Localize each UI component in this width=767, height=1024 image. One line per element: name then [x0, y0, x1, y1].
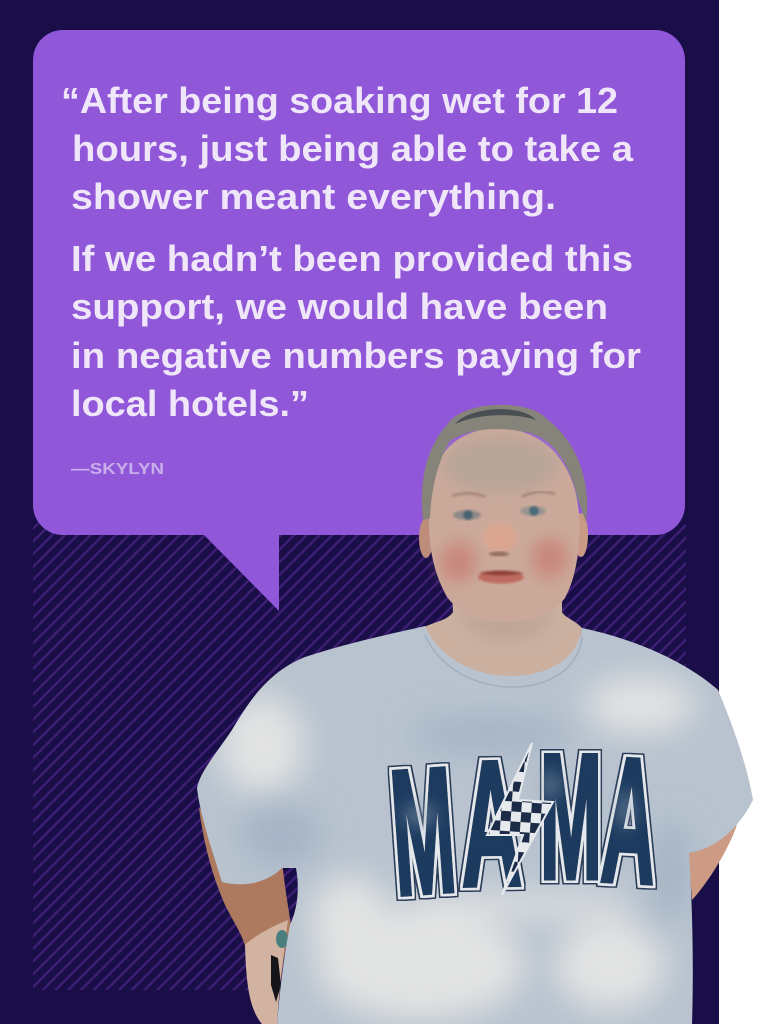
head — [419, 405, 588, 622]
left arm — [199, 808, 291, 1024]
quote text: If we hadn’t been provided this — [71, 238, 633, 279]
quote text: support, we would have been — [71, 286, 608, 327]
shirt lettering: M — [540, 717, 602, 916]
wrist tattoo — [276, 930, 288, 948]
speech bubble — [33, 30, 685, 611]
shirt lettering — [388, 749, 658, 901]
left wrist and hand — [245, 920, 288, 1024]
sunlight patches — [220, 677, 695, 1020]
person photo illustration — [190, 405, 760, 1024]
quote text: shower meant everything. — [71, 176, 556, 217]
nose — [483, 524, 517, 556]
quote text: local hotels.” — [71, 383, 309, 424]
neck shadow — [458, 612, 556, 640]
mouth — [478, 570, 524, 584]
forehead tone — [442, 437, 558, 493]
shirt shadows — [240, 717, 690, 920]
dark object at hand — [271, 955, 281, 1002]
left eye — [453, 510, 481, 520]
quote text: hours, just being able to take a — [72, 128, 634, 169]
cheeks — [440, 538, 568, 582]
t-shirt: A — [598, 720, 662, 921]
ears — [419, 518, 433, 558]
hair — [422, 405, 587, 522]
quote text: “After being soaking wet for 12 — [61, 80, 618, 121]
attribution: —SKYLYN — [71, 461, 164, 478]
striped background panel — [33, 520, 686, 990]
quote text — [61, 80, 641, 424]
shirt lettering: M — [385, 730, 461, 933]
right arm — [688, 825, 737, 900]
t-shirt — [190, 615, 760, 1024]
shirt lettering: A — [459, 723, 523, 923]
lettering fade patches — [402, 771, 635, 830]
face — [429, 428, 579, 622]
eyebrows — [452, 492, 555, 497]
collar — [425, 635, 582, 687]
quote text: in negative numbers paying for — [71, 335, 641, 376]
neck — [424, 590, 582, 678]
lightning bolt — [487, 743, 553, 895]
right eye — [520, 506, 546, 516]
